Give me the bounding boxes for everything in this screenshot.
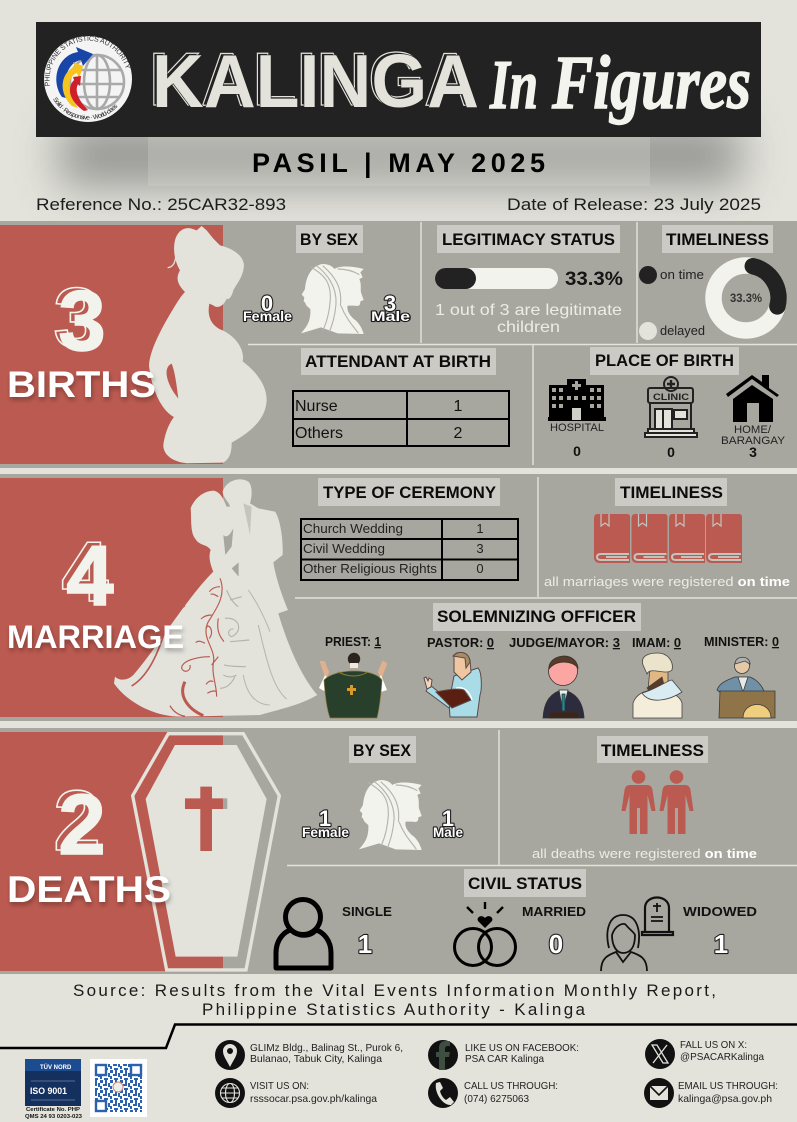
contact: facebook: PSA CAR Kalinga xyxy=(465,1053,544,1065)
progress bar xyxy=(435,268,558,289)
ceremony table: 3 xyxy=(476,541,484,556)
main title: KALINGA xyxy=(152,39,479,123)
single label: 1 xyxy=(358,929,372,959)
contact: website xyxy=(215,1078,377,1108)
marriage count: 4 xyxy=(61,525,109,620)
attendant table: 2 xyxy=(454,425,463,442)
ceremony heading: TYPE OF CEREMONY xyxy=(323,483,497,502)
married label xyxy=(522,904,586,959)
female count: 0 xyxy=(261,291,273,316)
officer labels: PASTOR: 0 xyxy=(427,635,494,650)
hospital label xyxy=(550,422,604,459)
marriage label: MARRIAGE xyxy=(7,619,184,655)
icon: home xyxy=(726,375,779,422)
widowed label: WIDOWED xyxy=(683,904,757,919)
title script: Figures xyxy=(551,41,751,125)
by sex heading xyxy=(349,736,416,763)
source note: Source: Results from the Vital Events Information Monthly Report, xyxy=(73,981,716,1000)
source note xyxy=(73,981,716,1019)
logo: PHILIPPINE STATISTICS AUTHORITY xyxy=(44,36,130,86)
female count: 1 xyxy=(319,806,331,831)
QR code xyxy=(90,1059,147,1117)
hospital label: HOSPITAL xyxy=(550,422,604,434)
timeliness heading xyxy=(662,225,773,253)
attendant heading xyxy=(301,348,496,375)
ceremony table: Other Religious Rights xyxy=(303,561,438,576)
marriage timeliness note: all marriages were registered on time xyxy=(544,574,790,589)
male count xyxy=(433,806,463,840)
single label: SINGLE xyxy=(342,904,392,919)
donut chart: 33.3% xyxy=(730,293,762,305)
births label: BIRTHS xyxy=(7,364,156,405)
panel: marriage xyxy=(0,474,797,721)
contact: X account: FALL US ON X: xyxy=(680,1039,747,1051)
deaths timeliness heading xyxy=(597,736,708,763)
contact: facebook: LIKE US ON FACEBOOK: xyxy=(465,1042,579,1054)
deaths count: 2 xyxy=(58,778,106,873)
icon: clinic: CLINIC xyxy=(653,392,689,403)
attendant table: Others xyxy=(295,425,343,442)
male count: 1 xyxy=(442,806,454,831)
hospital label: 0 xyxy=(573,443,581,459)
coffin xyxy=(133,734,279,970)
officer labels: PRIEST: 1 xyxy=(325,634,381,649)
clinic count: 0 xyxy=(667,444,675,460)
marriage timeliness heading xyxy=(615,478,727,506)
ceremony table: 1 xyxy=(476,521,484,536)
icon: clinic xyxy=(645,377,697,437)
contact: email xyxy=(644,1078,778,1108)
legitimacy heading: LEGITIMACY STATUS xyxy=(442,230,615,249)
by sex heading: BY SEX xyxy=(353,741,412,760)
attendant heading: ATTENDANT AT BIRTH xyxy=(305,352,491,371)
ceremony table: Church Wedding xyxy=(303,521,403,536)
attendant table: Nurse xyxy=(295,398,338,415)
icon: pastor xyxy=(424,652,481,717)
contact: email: EMAIL US THROUGH: xyxy=(678,1080,778,1092)
contact: website: rsssocar.psa.gov.ph/kalinga xyxy=(250,1093,377,1105)
source note: Philippine Statistics Authority - Kalinga xyxy=(202,1000,586,1019)
home label: BARANGAY xyxy=(721,435,786,447)
officer labels xyxy=(325,634,779,650)
title script: In xyxy=(489,47,538,124)
panel: deaths xyxy=(0,728,797,974)
subtitle band xyxy=(148,137,650,186)
reference number: Reference No.: 25CAR32-893 xyxy=(36,195,286,214)
ISO certificate badge: Certificate No. PHP xyxy=(26,1107,80,1113)
marriage count: 4 xyxy=(66,529,114,624)
attendant table xyxy=(293,391,509,446)
pregnant silhouette xyxy=(149,226,267,463)
contact: X account xyxy=(645,1039,764,1069)
widowed label: 1 xyxy=(714,929,728,959)
deaths count: 2 xyxy=(53,774,101,869)
female count xyxy=(243,291,293,324)
widowed label xyxy=(683,904,757,959)
icon: female and male heads xyxy=(301,264,364,334)
icon: minister xyxy=(717,657,775,718)
icon: female and male heads xyxy=(359,780,422,850)
title script xyxy=(489,41,751,125)
contact: address: Bulanao, Tabuk City, Kalinga xyxy=(250,1053,382,1065)
contact: website: VISIT US ON: xyxy=(250,1080,309,1092)
contact: phone: CALL US THROUGH: xyxy=(464,1080,558,1092)
donut chart xyxy=(714,266,779,330)
home label: 3 xyxy=(749,444,757,460)
ISO certificate badge: QMS 24 93 0203-023 xyxy=(25,1114,83,1120)
main title: KALINGA xyxy=(149,37,476,121)
deaths label: DEATHS xyxy=(7,869,171,910)
icon: judge xyxy=(543,656,584,718)
icon: imam xyxy=(633,653,682,718)
solemnizing heading: SOLEMNIZING OFFICER xyxy=(437,607,636,626)
legitimacy note: 1 out of 3 are legitimate xyxy=(435,302,622,319)
ceremony table xyxy=(301,519,518,580)
ceremony heading xyxy=(318,478,500,506)
legend: delayed: delayed xyxy=(660,323,705,338)
ceremony table: 0 xyxy=(476,561,484,576)
male count xyxy=(371,291,411,324)
contact: address: GLIMz Bldg., Balinag St., Purok 6, xyxy=(250,1042,403,1054)
title banner xyxy=(36,22,761,137)
officer labels: JUDGE/MAYOR: 3 xyxy=(509,635,620,650)
deaths timeliness heading: TIMELINESS xyxy=(601,741,704,760)
civil status heading: CIVIL STATUS xyxy=(468,874,582,893)
officer labels: IMAM: 0 xyxy=(632,635,681,650)
female count xyxy=(302,806,349,840)
contact: phone xyxy=(428,1078,558,1108)
births count: 3 xyxy=(58,274,106,369)
icon: priest xyxy=(319,653,387,718)
icon: widow with gravestone xyxy=(601,898,673,971)
solemnizing heading xyxy=(433,603,641,631)
footer divider xyxy=(0,1024,797,1048)
births count: 3 xyxy=(53,271,101,366)
legitimacy percent: 33.3% xyxy=(565,269,623,290)
married label: MARRIED xyxy=(522,904,586,919)
panel: births xyxy=(0,221,797,468)
marriage timeliness heading: TIMELINESS xyxy=(620,483,723,502)
contact: X account: @PSACARKalinga xyxy=(680,1051,764,1063)
icon: hospital xyxy=(548,379,606,421)
home label xyxy=(721,424,786,460)
male count: 3 xyxy=(384,291,396,316)
attendant table: 1 xyxy=(454,398,463,415)
home label: HOME/ xyxy=(734,424,772,436)
married label: 0 xyxy=(549,929,563,959)
subtitle text: PASIL | MAY 2025 xyxy=(252,148,545,178)
contact: phone: (074) 6275063 xyxy=(464,1093,529,1105)
civil status heading xyxy=(464,869,586,897)
icon: single person xyxy=(276,900,331,968)
officer labels: MINISTER: 0 xyxy=(704,634,779,649)
contact: facebook xyxy=(428,1040,579,1070)
by sex heading: BY SEX xyxy=(300,230,359,249)
logo: Solid · Responsive · World-class xyxy=(54,98,118,120)
header shadow xyxy=(60,125,740,185)
contact: address xyxy=(215,1040,403,1070)
by sex heading xyxy=(296,225,363,253)
female count: Female xyxy=(243,309,293,324)
timeliness heading: TIMELINESS xyxy=(666,230,769,249)
ISO certificate badge: TÜV NORD xyxy=(40,1064,72,1071)
legitimacy heading xyxy=(437,225,620,253)
ISO certificate badge xyxy=(25,1059,83,1120)
legend: on time xyxy=(639,266,704,284)
male count: Male xyxy=(371,309,411,324)
ISO certificate badge: ISO 9001 xyxy=(30,1086,68,1097)
legitimacy note xyxy=(435,302,622,336)
logo xyxy=(44,36,132,122)
single label xyxy=(342,904,392,959)
icon: wedding rings xyxy=(454,902,516,966)
place of birth heading: PLACE OF BIRTH xyxy=(595,351,734,370)
male count: Male xyxy=(433,825,463,840)
place of birth heading xyxy=(590,347,739,375)
female count: Female xyxy=(302,825,349,840)
release date: Date of Release: 23 July 2025 xyxy=(507,195,761,214)
legitimacy note: children xyxy=(497,319,560,336)
icon: four books xyxy=(594,514,742,563)
legend: delayed xyxy=(639,322,705,340)
contact: email: kalinga@psa.gov.ph xyxy=(678,1093,772,1105)
ceremony table: Civil Wedding xyxy=(303,541,385,556)
deaths timeliness note: all deaths were registered on time xyxy=(532,846,757,861)
legend: on time: on time xyxy=(660,267,704,282)
couple silhouette xyxy=(114,479,317,717)
icon: two people xyxy=(622,770,694,834)
